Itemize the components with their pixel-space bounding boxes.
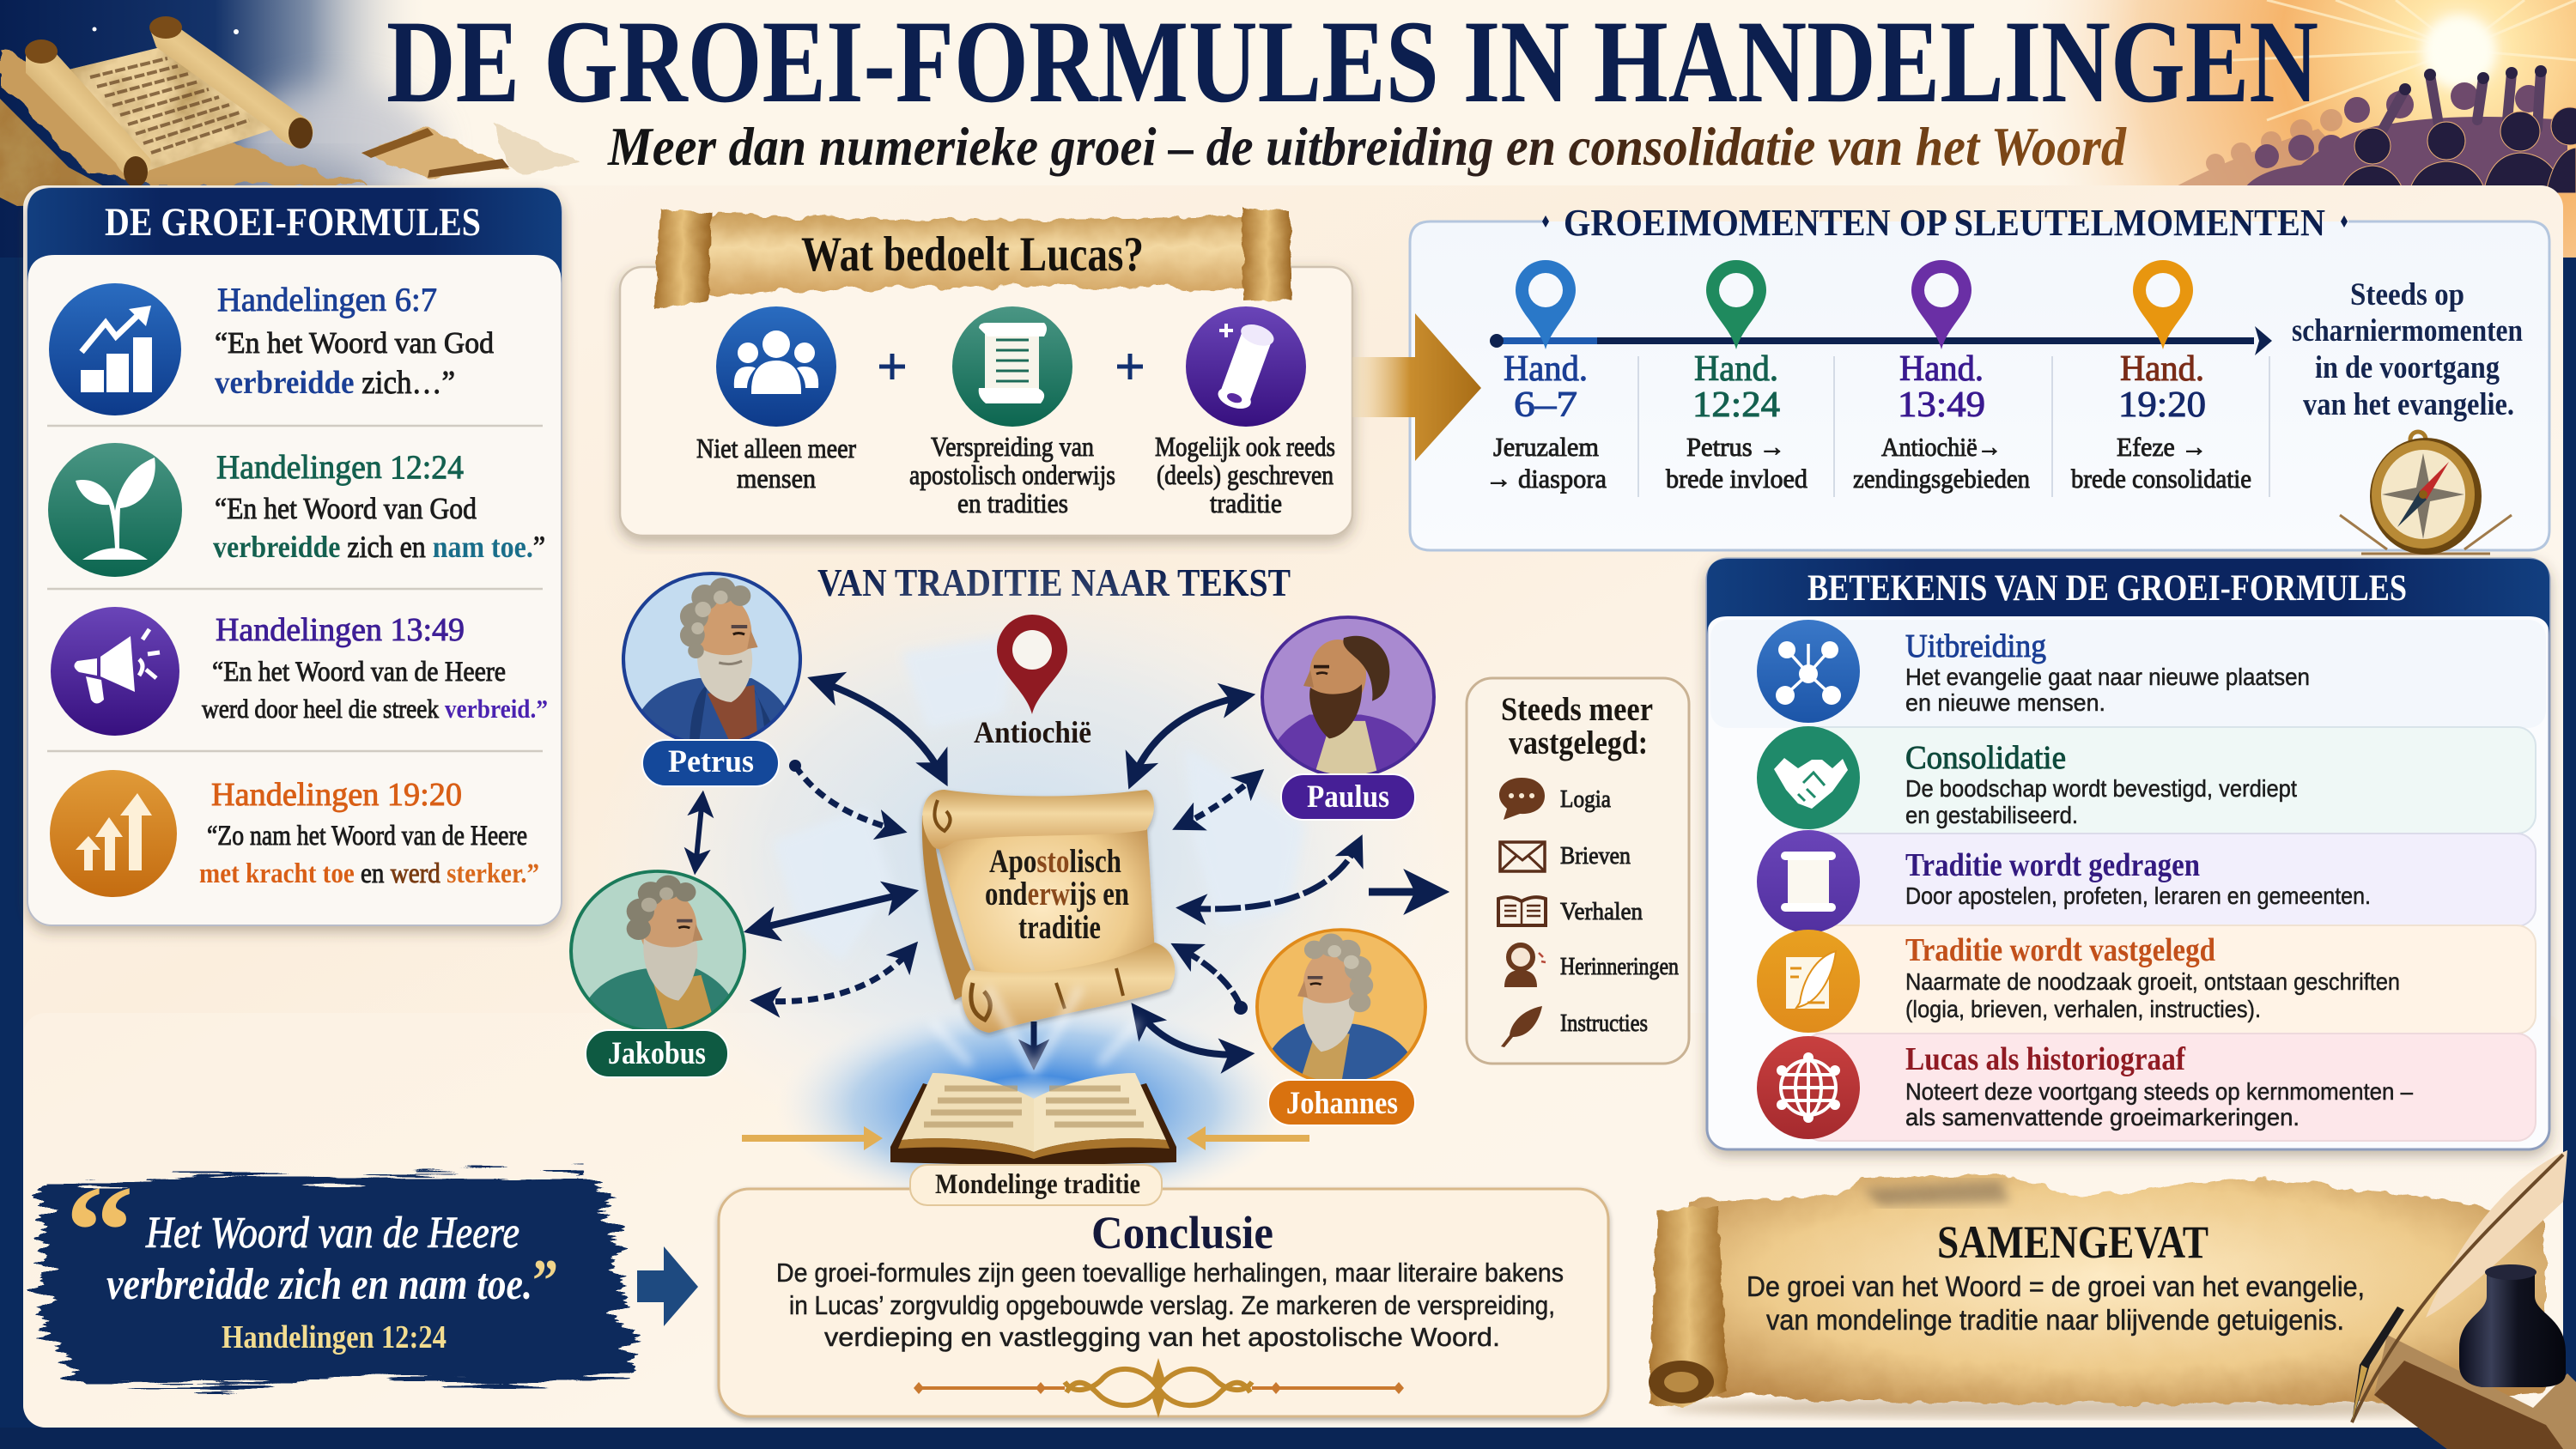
- quote: brush stroke: Het Woord van de Heere: [145, 1209, 519, 1258]
- illustration: quill, ink and book: [2352, 1150, 2576, 1449]
- icon: groeigrafiek: [49, 283, 181, 415]
- row: Consolidatie: De boodschap wordt bevestigd, verdiept: [1905, 775, 2297, 802]
- location: Antiochië: [974, 615, 1091, 749]
- item: Instructies: Instructies: [1560, 1009, 1648, 1037]
- marker: Hand. 6-7: Jeruzalem: [1493, 432, 1599, 462]
- banner: perkament: Wat bedoelt Lucas?: [801, 227, 1144, 282]
- marker: Hand. 13:49: zendingsgebieden: [1853, 464, 2030, 494]
- panel: de groei-formules: [27, 188, 562, 925]
- caption: verspreiding: [909, 431, 1115, 518]
- panel: conclusie: Conclusie: [1091, 1207, 1273, 1258]
- icon: opgerolde rol: [1186, 306, 1306, 427]
- item: Logia: Logia: [1560, 785, 1611, 813]
- row: Handelingen 6:7: “En het Woord van God: [215, 326, 494, 360]
- icon: rol met tekst: [952, 306, 1072, 427]
- row: Uitbreiding: Uitbreiding: [1905, 628, 2046, 664]
- marker: Hand. 19:20: 19:20: [2118, 385, 2206, 425]
- marker: Hand. 12:24: 12:24: [1692, 385, 1780, 425]
- row: Handelingen 13:49: werd door heel die streek verbreid.”: [202, 694, 548, 724]
- text: scharniermomenten: in de voortgang: [2315, 350, 2500, 385]
- item: Verhalen: Verhalen: [1560, 898, 1643, 925]
- row: Consolidatie: Consolidatie: [1905, 740, 2066, 776]
- row: Handelingen 6:7: [49, 282, 494, 415]
- panel: conclusie: verdieping en vastlegging van het apostolische Woord.: [824, 1322, 1500, 1352]
- row: Handelingen 13:49: [51, 607, 548, 736]
- marker: Hand. 12:24: brede invloed: [1666, 464, 1807, 494]
- panel: groeimomenten timeline: [1410, 202, 2549, 555]
- panel: conclusie: in Lucas’ zorgvuldig opgebouwde verslag. Ze markeren de verspreiding,: [789, 1290, 1555, 1320]
- row: Consolidatie: en gestabiliseerd.: [1905, 802, 2078, 828]
- caption: geschreven traditie: (deels) geschreven: [1157, 459, 1334, 490]
- scroll: apostolisch onderwijs: [922, 790, 1175, 1033]
- row: Uitbreiding: en nieuwe mensen.: [1905, 689, 2105, 716]
- row: Handelingen 13:49: Handelingen 13:49: [216, 612, 465, 648]
- marker: Hand. 6-7: [1485, 260, 1607, 494]
- row: Uitbreiding: [1757, 620, 2310, 723]
- marker: Hand. 19:20: brede consolidatie: [2071, 464, 2251, 494]
- plus signs: [879, 354, 1143, 379]
- marker: Hand. 13:49: Hand.: [1899, 349, 1984, 389]
- panel: conclusie: [719, 1189, 1608, 1418]
- panel: wat bedoelt Lucas: [620, 208, 1352, 536]
- icon: perkamentrol: [1757, 830, 1860, 933]
- name: Jakobus: Jakobus: [608, 1036, 706, 1071]
- panel: steeds meer vastgelegd: Steeds meer: [1501, 691, 1653, 728]
- arrow: gold to timeline: [1352, 313, 1481, 461]
- row: Handelingen 12:24: Handelingen 12:24: [216, 449, 464, 486]
- panel: samengevat parchment: De groei van het Woord = de groei van het evangelie,: [1747, 1270, 2365, 1302]
- panel: betekenis van de groei-formules: BETEKENIS VAN DE GROEI-FORMULES: [1807, 568, 2407, 609]
- row: Handelingen 6:7: verbreidde zich…”: [215, 365, 455, 401]
- quote: brush stroke: ”: [532, 1248, 558, 1314]
- arrow: quote to conclusion: [637, 1246, 698, 1326]
- diagram: van traditie naar tekst: [571, 549, 1451, 1215]
- marker: Hand. 19:20: Hand.: [2120, 349, 2204, 389]
- arrow: gold right: [1187, 1126, 1309, 1150]
- caption: geschreven traditie: traditie: [1210, 488, 1282, 518]
- row: Traditie wordt vastgelegd: [1757, 930, 2400, 1033]
- illustration: ancient scrolls top left: [0, 16, 580, 206]
- timeline arrow: [1490, 326, 2272, 355]
- marker: Hand. 6-7: Hand.: [1504, 349, 1588, 389]
- caption: mensen: mensen: [737, 463, 816, 494]
- heading: van traditie naar tekst: VAN TRADITIE NAAR TEKST: [817, 561, 1291, 604]
- scroll: apostolisch onderwijs: traditie: [1018, 909, 1101, 946]
- icon: megafoon: [51, 607, 179, 736]
- quote: brush stroke: verbreidde zich en nam toe.: [106, 1260, 532, 1309]
- row: Handelingen 19:20: [50, 770, 539, 897]
- icon: compass: [2340, 432, 2512, 555]
- caption: mensen: Niet alleen meer: [696, 433, 856, 464]
- row: Handelingen 19:20: “Zo nam het Woord van de Heere: [207, 821, 527, 852]
- item: Herinneringen: [1504, 945, 1679, 987]
- icon: wereldbol: [1757, 1036, 1860, 1139]
- row: Traditie wordt vastgelegd: (logia, brieven, verhalen, instructies).: [1905, 996, 2261, 1022]
- marker: Hand. 19:20: Efeze →: [2117, 432, 2207, 462]
- name: Paulus: Paulus: [1307, 779, 1389, 815]
- text: scharniermomenten: Steeds op: [2350, 277, 2464, 312]
- row: Handelingen 6:7: Handelingen 6:7: [217, 282, 437, 318]
- text: scharniermomenten: scharniermomenten: [2292, 313, 2523, 349]
- row: Traditie wordt gedragen: Traditie wordt gedragen: [1905, 847, 2200, 883]
- scroll: apostolisch onderwijs: onderwijs en: [985, 876, 1129, 912]
- marker: Hand. 6-7: 6–7: [1514, 385, 1577, 425]
- illustration: crowd silhouettes: [2164, 65, 2576, 193]
- panel: samengevat parchment: SAMENGEVAT: [1937, 1216, 2208, 1268]
- label: mondelinge traditie: [910, 1165, 1162, 1205]
- heading: groeimomenten: GROEIMOMENTEN OP SLEUTELMOMENTEN: [1564, 202, 2325, 244]
- marker: Hand. 19:20: [2071, 260, 2251, 494]
- row: Handelingen 19:20: met kracht toe en werd sterker.”: [199, 858, 539, 889]
- row: Lucas als historiograaf: [1757, 1036, 2413, 1139]
- scroll: apostolisch onderwijs: Apostolisch: [989, 843, 1121, 880]
- row: Handelingen 12:24: verbreidde zich en nam toe.”: [213, 530, 545, 564]
- row: Handelingen 12:24: “En het Woord van God: [215, 492, 477, 525]
- caption: geschreven traditie: Mogelijk ook reeds: [1155, 431, 1335, 462]
- ornament: [914, 1358, 1404, 1418]
- heading: de groei-formules: DE GROEI-FORMULES: [105, 200, 481, 245]
- marker: Hand. 13:49: Antiochië→: [1881, 432, 2002, 462]
- marker: Hand. 12:24: [1666, 260, 1807, 494]
- row: Traditie wordt gedragen: [1757, 830, 2371, 933]
- row: Traditie wordt vastgelegd: Traditie wordt vastgelegd: [1905, 932, 2215, 968]
- marker: Hand. 12:24: Hand.: [1694, 349, 1778, 389]
- text: scharniermomenten: van het evangelie.: [2303, 387, 2514, 422]
- marker: Hand. 6-7: → diaspora: [1485, 464, 1607, 494]
- icon: netwerk: [1757, 620, 1860, 723]
- caption: verspreiding: en tradities: [957, 488, 1068, 518]
- name: Jakobus: [586, 1030, 728, 1077]
- marker: Hand. 12:24: Petrus →: [1686, 432, 1785, 462]
- icon: stijgende pijlen: [50, 770, 177, 897]
- banner: perkament: [654, 208, 1292, 309]
- icon: mensen: [716, 306, 836, 427]
- caption: mensen: [696, 433, 856, 494]
- location: Antiochië: Antiochië: [974, 715, 1091, 749]
- caption: verspreiding: apostolisch onderwijs: [909, 459, 1115, 490]
- portrait: Petrus: [623, 573, 800, 786]
- name: Johannes: [1268, 1080, 1415, 1125]
- item: Brieven: [1500, 842, 1631, 871]
- marker: Hand. 13:49: [1853, 260, 2030, 494]
- portrait: Jakobus: [571, 871, 744, 1077]
- icon: kiemplant: [48, 443, 182, 577]
- text: scharniermomenten: [2292, 277, 2523, 422]
- panel: steeds meer vastgelegd: [1467, 678, 1689, 1064]
- panel: betekenis van de groei-formules: [1707, 559, 2549, 1149]
- item: Brieven: Brieven: [1560, 842, 1631, 870]
- icon: veer en papier: [1757, 930, 1860, 1033]
- book: [890, 987, 1176, 1166]
- row: Uitbreiding: Het evangelie gaat naar nieuwe plaatsen: [1905, 664, 2310, 690]
- row: Handelingen 19:20: Handelingen 19:20: [211, 777, 462, 813]
- quote marks: “: [65, 1160, 134, 1302]
- caption: verspreiding: Verspreiding van: [931, 431, 1094, 462]
- item: Logia: [1499, 778, 1611, 820]
- panel: steeds meer vastgelegd: vastgelegd:: [1509, 724, 1648, 761]
- quote: brush stroke: [43, 1160, 631, 1384]
- map glow: [592, 549, 1451, 1215]
- subtitle: Meer dan numerieke groei – de uitbreiding en consolidatie van het Woord: [607, 116, 2127, 177]
- row: Lucas als historiograaf: als samenvattende groeimarkeringen.: [1905, 1104, 2300, 1131]
- name: Petrus: Petrus: [668, 744, 754, 779]
- row: Traditie wordt gedragen: Door apostelen, profeten, leraren en gemeenten.: [1905, 882, 2371, 909]
- row: Handelingen 12:24: [48, 443, 545, 577]
- name: Johannes: Johannes: [1286, 1086, 1398, 1121]
- row: Lucas als historiograaf: Lucas als historiograaf: [1905, 1041, 2186, 1077]
- arrows: apostles and scroll: [696, 681, 1436, 1061]
- caption: geschreven traditie: [1155, 431, 1335, 518]
- item: Instructies: [1501, 1006, 1648, 1047]
- marker: Hand. 13:49: 13:49: [1898, 385, 1985, 425]
- arrow: gold left: [742, 1126, 883, 1150]
- icon: handdruk: [1757, 726, 1860, 829]
- row: Handelingen 13:49: “En het Woord van de Heere: [212, 657, 506, 688]
- item: Herinneringen: Herinneringen: [1560, 954, 1679, 980]
- portrait: Paulus: [1262, 617, 1434, 820]
- panel: conclusie: De groei-formules zijn geen toevallige herhalingen, maar literaire bakens: [776, 1258, 1564, 1288]
- row: Traditie wordt vastgelegd: Naarmate de noodzaak groeit, ontstaan geschriften: [1905, 968, 2400, 995]
- row: Consolidatie: [1757, 726, 2297, 829]
- panel: samengevat parchment: van mondelinge traditie naar blijvende getuigenis.: [1766, 1304, 2344, 1336]
- quote: brush stroke: Handelingen 12:24: [222, 1319, 447, 1355]
- label: mondelinge traditie: Mondelinge traditie: [935, 1169, 1140, 1200]
- name: Petrus: [642, 740, 779, 786]
- name: Paulus: [1281, 774, 1415, 820]
- row: Lucas als historiograaf: Noteert deze voortgang steeds op kernmomenten –: [1905, 1078, 2413, 1105]
- portrait: Johannes: [1257, 930, 1425, 1125]
- panel: samengevat parchment: [1649, 1174, 2546, 1418]
- item: Verhalen: [1498, 897, 1643, 925]
